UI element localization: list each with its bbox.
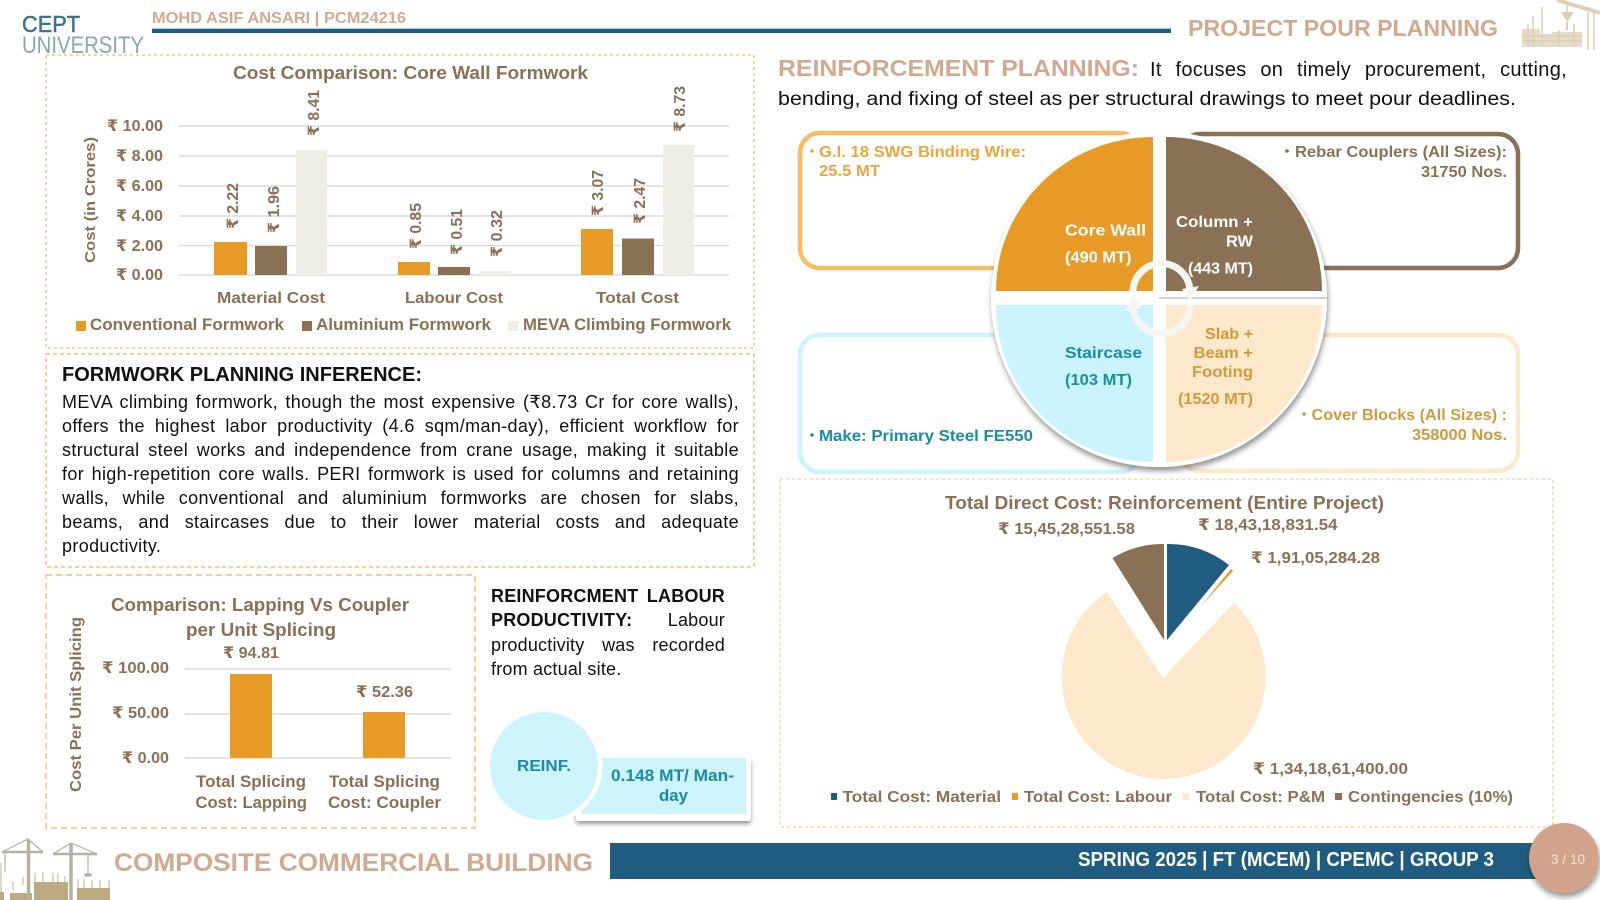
crane two	[53, 843, 97, 900]
crane one	[2, 839, 43, 900]
quadrant labels: Footing	[1192, 364, 1253, 381]
note: cover blocks: 358000 Nos.	[1412, 427, 1507, 444]
panel: lapping vs coupler chart	[46, 575, 475, 828]
value labels	[223, 645, 413, 701]
y-axis title: Cost Per Unit Splicing	[68, 617, 85, 792]
text block: formwork planning inference: offers the highest labor productivity (4.6 sqm/man-day), efficient workflow for	[62, 416, 739, 436]
text block: formwork planning inference: for high-repetition core walls. PERI formwork is used for columns and retaining	[62, 464, 739, 484]
chart title: per Unit Splicing	[186, 620, 336, 640]
quadrant labels: (1520 MT)	[1178, 391, 1253, 408]
quadrant labels: Column +	[1176, 214, 1253, 231]
gridlines	[185, 669, 451, 758]
bars: aluminium formwork	[255, 238, 654, 275]
note: binding wire: G.I. 18 SWG Binding Wire:	[819, 144, 1026, 161]
data labels: ₹ 3.07	[590, 170, 607, 216]
data labels	[225, 86, 689, 257]
y tick labels: ₹ 50.00	[112, 705, 169, 722]
quadrant: core wall	[996, 137, 1153, 291]
pie slice: plant and machinery	[1062, 592, 1266, 779]
callout circle: REINF.: REINF.	[517, 758, 571, 775]
value labels: ₹ 52.36	[356, 684, 413, 701]
pie value labels: ₹ 1,34,18,61,400.00	[1253, 761, 1408, 778]
chart title: Cost Comparison: Core Wall Formwork	[233, 63, 589, 83]
category labels	[196, 773, 442, 812]
text block: formwork planning inference: MEVA climbing formwork, though the most expensive (₹8.73 Cr for core walls),	[62, 392, 739, 412]
page number badge: 3 / 10	[1551, 851, 1585, 867]
quadrant labels: RW	[1226, 234, 1254, 250]
category labels: Labour Cost	[405, 290, 504, 307]
data labels: ₹ 8.41	[306, 90, 323, 136]
text block: formwork planning inference: structural steel works and independence from crane usage, making it suitable	[62, 440, 739, 460]
quadrant: staircase	[996, 305, 1153, 462]
category labels: Total Splicing	[196, 773, 306, 791]
bars	[230, 674, 405, 758]
y-axis tick labels	[107, 118, 163, 284]
header rule	[152, 28, 1171, 33]
y-axis gridlines	[179, 126, 729, 275]
note: rebar couplers	[1285, 144, 1507, 181]
data labels: ₹ 2.22	[225, 183, 242, 229]
callout circle: REINF.	[486, 708, 602, 824]
category labels: Cost: Lapping	[196, 794, 307, 812]
pie value labels: ₹ 1,91,05,284.28	[1251, 550, 1380, 567]
y tick labels: ₹ 100.00	[102, 660, 169, 677]
logo: CEPT University	[22, 11, 144, 59]
panel: total direct cost pie chart	[780, 479, 1553, 827]
data labels: ₹ 1.96	[266, 186, 283, 233]
y-axis tick labels: ₹ 10.00	[107, 118, 163, 135]
text block: formwork planning inference: productivity.	[62, 536, 161, 556]
chart title	[111, 595, 409, 640]
value labels: ₹ 94.81	[223, 645, 279, 662]
note: cover blocks	[1302, 407, 1507, 444]
footer bar	[610, 843, 1570, 879]
callout: reinforcement productivity value: day	[659, 787, 689, 805]
category labels	[217, 290, 680, 307]
y-axis title: Cost (in Crores)	[82, 137, 99, 263]
icon: central cycle arrows	[1125, 264, 1199, 334]
logo: CEPT University: UNIVERSITY	[22, 32, 144, 59]
box: make	[800, 335, 1140, 472]
legend: Aluminium Formwork	[316, 316, 492, 334]
quadrant labels: (443 MT)	[1188, 260, 1253, 278]
icon: building under crane, top right	[1522, 0, 1600, 50]
pie value labels: ₹ 18,43,18,831.54	[1198, 517, 1338, 534]
data labels: ₹ 8.73	[672, 86, 689, 132]
quadrant labels: (490 MT)	[1065, 250, 1132, 266]
note: cover blocks: Cover Blocks (All Sizes) :	[1312, 407, 1507, 424]
pie slice: labour	[1200, 569, 1233, 607]
pie legend: Total Cost: P&M	[1196, 789, 1325, 806]
note: binding wire: 25.5 MT	[819, 163, 880, 180]
panel: core wall formwork cost chart	[46, 55, 754, 348]
quadrant labels	[1065, 214, 1254, 408]
text block: reinforcement planning intro first line: It focuses on timely procurement, cutting,	[1150, 59, 1567, 81]
text block: formwork planning inference	[62, 392, 739, 556]
y tick labels	[102, 660, 169, 767]
category labels: Total Splicing	[329, 773, 440, 791]
box: cover blocks	[1180, 335, 1518, 471]
quadrant: column and RW	[1166, 137, 1322, 291]
quadrant labels: Beam +	[1194, 345, 1253, 362]
quantity boxes	[800, 133, 1518, 472]
logo: CEPT University: CEPT	[22, 11, 80, 37]
text block: reinforcement labour productivity	[491, 586, 725, 679]
header: section title: PROJECT POUR PLANNING	[1188, 15, 1498, 41]
data labels: ₹ 0.32	[489, 210, 506, 257]
chart title: Comparison: Lapping Vs Coupler	[111, 595, 409, 615]
quadrant: slab, beam and footing	[1166, 305, 1322, 462]
page number badge	[1529, 823, 1599, 893]
text block: reinforcement labour productivity: REINFORCMENT LABOUR	[491, 586, 725, 606]
pie legend: Total Cost: Labour	[1024, 789, 1172, 806]
note: rebar couplers: Rebar Couplers (All Sizes):	[1295, 144, 1507, 161]
legend	[76, 316, 732, 334]
category labels: Total Cost	[596, 290, 680, 307]
y-axis tick labels: ₹ 6.00	[116, 178, 163, 195]
quadrant labels: Staircase	[1065, 345, 1142, 362]
pie value labels: ₹ 15,45,28,551.58	[998, 521, 1135, 538]
category labels: Cost: Coupler	[328, 794, 442, 812]
pie legend: Contingencies (10%)	[1348, 789, 1513, 806]
note: steel make: Make: Primary Steel FE550	[819, 428, 1033, 445]
pie value labels	[998, 517, 1408, 778]
y-axis tick labels: ₹ 2.00	[116, 238, 163, 255]
y-axis tick labels: ₹ 8.00	[116, 148, 163, 165]
box: binding wire	[800, 133, 1140, 268]
text block: reinforcement labour productivity: productivity was recorded	[491, 635, 725, 655]
data labels: ₹ 0.51	[449, 209, 466, 255]
pie legend	[831, 789, 1513, 806]
callout: reinforcement productivity value: 0.148 MT/ Man-	[611, 767, 734, 785]
y-axis tick labels: ₹ 0.00	[116, 267, 163, 284]
pie slice: material	[1167, 544, 1229, 640]
quadrant labels: Core Wall	[1065, 222, 1146, 240]
data labels: ₹ 2.47	[632, 178, 649, 224]
panel frame: formwork planning inference	[46, 354, 754, 567]
header: student name: MOHD ASIF ANSARI | PCM24216	[152, 10, 406, 27]
y tick labels: ₹ 0.00	[122, 750, 169, 767]
bars: conventional formwork	[214, 229, 613, 275]
icon: cranes and building, bottom left	[0, 839, 110, 900]
note: rebar couplers: 31750 Nos.	[1421, 164, 1507, 181]
quantity notes	[810, 144, 1507, 445]
quadrant diagram: steel quantity by element	[991, 131, 1327, 467]
box: rebar couplers	[1180, 134, 1518, 268]
quadrant labels: (103 MT)	[1065, 372, 1132, 389]
bars: MEVA climbing formwork	[296, 145, 694, 275]
text block: reinforcement labour productivity: from actual site.	[491, 659, 621, 679]
heading: reinforcement planning: REINFORCEMENT PLANNING:	[778, 55, 1139, 81]
footer: project title: COMPOSITE COMMERCIAL BUILDING	[114, 849, 593, 877]
quadrant divider shadow	[1159, 297, 1327, 299]
text block: reinforcement labour productivity: PRODUCTIVITY: Labour	[491, 610, 725, 630]
callout: reinforcement productivity value	[486, 708, 751, 824]
heading: formwork planning inference: FORMWORK PLANNING INFERENCE:	[62, 364, 422, 386]
text block: formwork planning inference: walls, while conventional and aluminium formworks are chosen for slabs,	[62, 488, 739, 508]
data labels: ₹ 0.85	[408, 203, 425, 249]
intro text second line: bending, and fixing of steel as per structural drawings to meet pour deadlines.	[778, 88, 1516, 110]
quadrant labels: Slab +	[1205, 326, 1253, 343]
chart title: Total Direct Cost: Reinforcement (Entire Project)	[945, 493, 1384, 513]
legend: MEVA Climbing Formwork	[523, 316, 732, 334]
pie slice: contingencies	[1112, 544, 1164, 640]
y-axis tick labels: ₹ 4.00	[116, 208, 163, 225]
category labels: Material Cost	[217, 290, 326, 307]
legend: Conventional Formwork	[90, 316, 285, 334]
note: binding wire	[810, 144, 1026, 180]
footer text: SPRING 2025 | FT (MCEM) | CPEMC | GROUP 3	[1078, 849, 1494, 871]
pie legend: Total Cost: Material	[842, 789, 1001, 806]
text block: formwork planning inference: beams, and staircases due to their lower material costs and adequate	[62, 512, 739, 532]
